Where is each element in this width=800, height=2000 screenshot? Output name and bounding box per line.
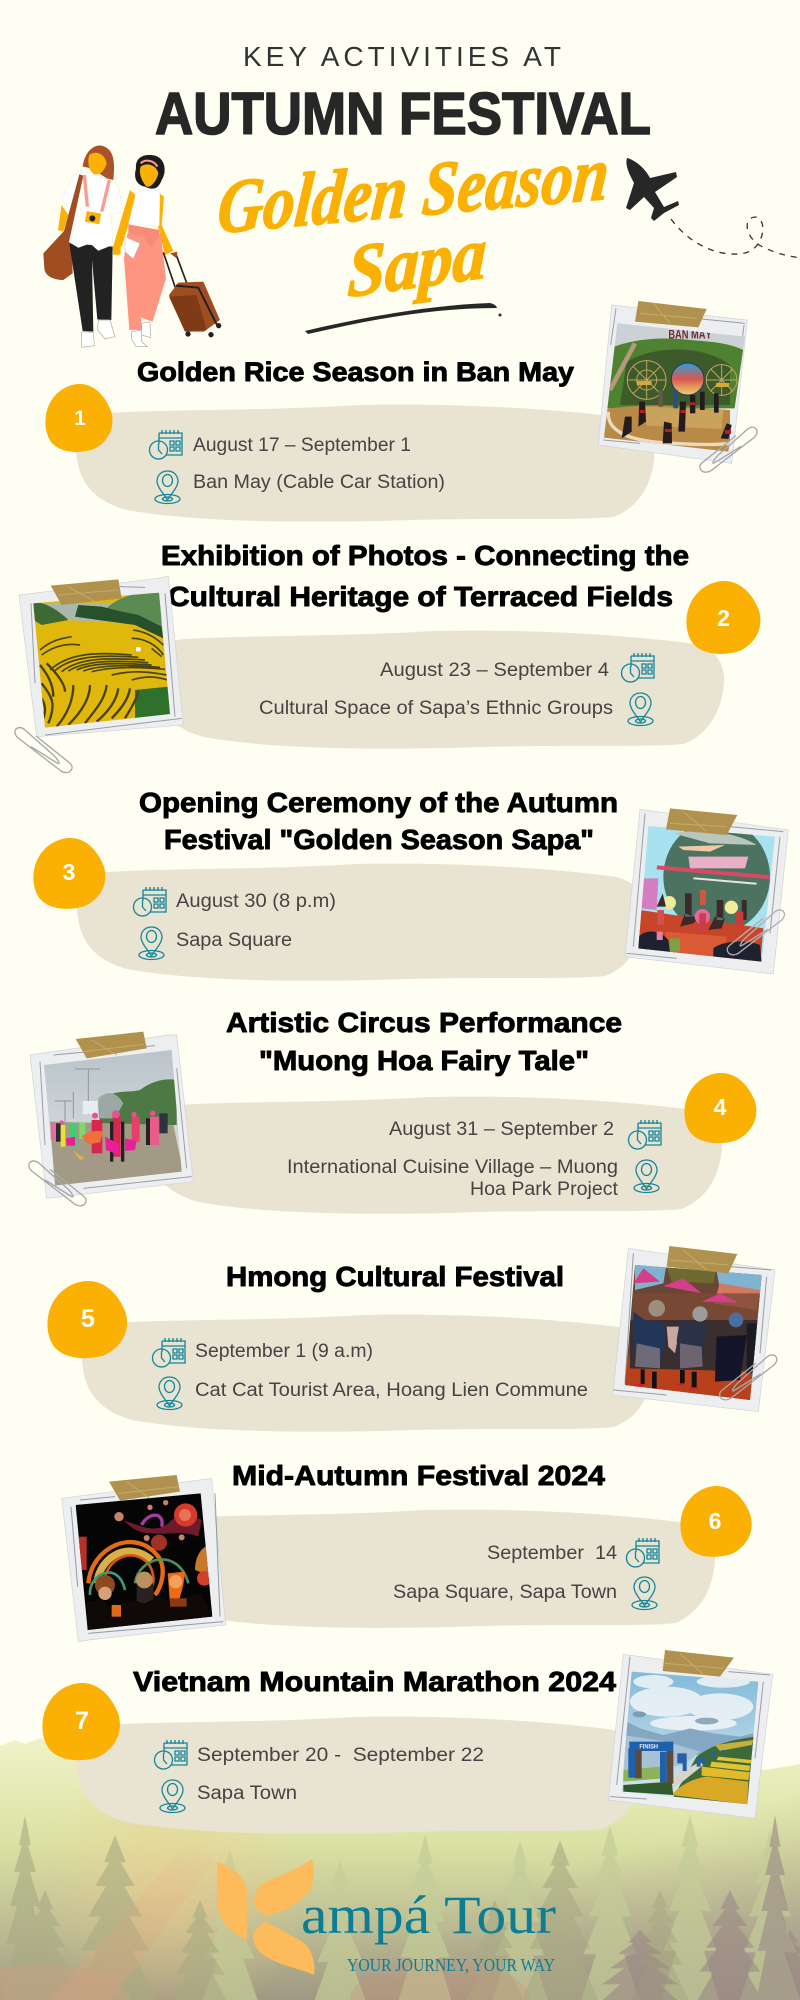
icon: location 5	[157, 1377, 182, 1410]
heading 2: Cultural Heritage of Terraced Fields	[168, 581, 673, 612]
logo wordmark: ampá Tour	[301, 1885, 556, 1945]
icon: airplane	[626, 158, 679, 221]
photo 7	[608, 1650, 773, 1818]
location 6: Sapa Square, Sapa Town	[393, 1582, 617, 1603]
panel background 2	[153, 631, 724, 749]
panel: activity 6	[62, 1460, 752, 1642]
brush underline	[305, 303, 502, 334]
illustration: two travelers	[43, 145, 221, 347]
photo 5	[613, 1246, 777, 1412]
icon: location 7	[160, 1780, 185, 1812]
icon: location 6	[632, 1577, 657, 1610]
heading 3: Opening Ceremony of the Autumn	[139, 787, 618, 818]
heading 5: Hmong Cultural Festival	[226, 1261, 564, 1292]
forest backdrop	[0, 1738, 800, 2000]
number badge 4: 4	[714, 1094, 727, 1120]
photo 2	[15, 576, 183, 773]
panel background 7	[76, 1717, 642, 1834]
flight path dashes	[671, 217, 800, 258]
panel background 5	[82, 1315, 654, 1432]
heading 4	[226, 1007, 622, 1076]
panel: activity 1	[45, 295, 770, 522]
photo 6	[62, 1475, 226, 1642]
location 7: Sapa Town	[197, 1783, 297, 1804]
logo mark	[217, 1859, 315, 1975]
panel background 3	[77, 864, 645, 981]
icon: calendar 6	[626, 1538, 659, 1567]
photo 1	[598, 301, 758, 473]
number badge 4	[684, 1073, 756, 1143]
date 6: September 14	[487, 1543, 617, 1564]
photo 4	[29, 1032, 193, 1206]
location 4: International Cuisine Village – Muong	[287, 1157, 618, 1178]
panel background 4	[148, 1097, 722, 1214]
icon: calendar 2	[622, 653, 654, 682]
panel background 6	[145, 1510, 715, 1628]
icon: calendar 7	[154, 1740, 187, 1769]
location 4	[287, 1157, 619, 1200]
location 5: Cat Cat Tourist Area, Hoang Lien Commune	[195, 1380, 588, 1401]
icon: location 2	[628, 693, 653, 726]
number badge 1	[45, 384, 113, 452]
icon: calendar 1	[150, 430, 182, 459]
panel: activity 5	[47, 1246, 777, 1432]
photo 1: BẢN MÂY	[668, 326, 712, 341]
number badge 5: 5	[81, 1305, 95, 1333]
number badge 3: 3	[63, 859, 75, 885]
heading 4: "Muong Hoa Fairy Tale"	[259, 1045, 589, 1076]
heading 3: Festival "Golden Season Sapa"	[164, 824, 594, 855]
title: golden season: Golden Season	[215, 131, 612, 250]
panel: activity 2	[15, 540, 760, 773]
location 3: Sapa Square	[176, 930, 292, 951]
heading 3	[139, 787, 618, 855]
title: key activities at: KEY ACTIVITIES AT	[243, 41, 561, 72]
date 7: September 20 - September 22	[197, 1745, 484, 1766]
logo: kampa tour	[217, 1859, 556, 1975]
photo 7: FINISH	[639, 1744, 658, 1751]
date 5: September 1 (9 a.m)	[195, 1341, 373, 1362]
heading 2	[161, 540, 689, 612]
heading 7: Vietnam Mountain Marathon 2024	[133, 1666, 616, 1697]
icon: calendar 5	[152, 1338, 185, 1367]
number badge 3	[33, 838, 105, 909]
location 2: Cultural Space of Sapa’s Ethnic Groups	[259, 698, 613, 719]
number badge 2	[686, 581, 760, 654]
location 4: Hoa Park Project	[470, 1179, 619, 1200]
number badge 7: 7	[75, 1707, 89, 1735]
heading 6: Mid-Autumn Festival 2024	[232, 1460, 605, 1491]
number badge 7	[42, 1683, 120, 1760]
icon: location 4	[634, 1160, 659, 1192]
number badge 6: 6	[709, 1508, 721, 1534]
icon: calendar 3	[134, 887, 166, 916]
panel: activity 3	[33, 787, 788, 981]
title: sapa: Sapa	[346, 212, 488, 314]
heading 4: Artistic Circus Performance	[226, 1007, 622, 1038]
logo tagline: YOUR JOURNEY, YOUR WAY	[347, 1955, 555, 1975]
icon: location 1	[155, 471, 180, 504]
panel: activity 4	[29, 1007, 756, 1214]
number badge 2: 2	[717, 605, 730, 631]
number badge 1: 1	[74, 407, 86, 430]
icon: calendar 4	[628, 1120, 661, 1149]
panel: activity 7	[42, 1650, 773, 1834]
icon: location 3	[139, 927, 164, 960]
title: autumn festival: AUTUMN FESTIVAL	[155, 81, 651, 147]
date 1: August 17 – September 1	[193, 435, 411, 456]
number badge 6	[680, 1486, 752, 1557]
date 4: August 31 – September 2	[389, 1119, 614, 1140]
heading 1: Golden Rice Season in Ban May	[137, 357, 574, 387]
location 1: Ban May (Cable Car Station)	[193, 472, 445, 493]
heading 2: Exhibition of Photos - Connecting the	[161, 540, 689, 571]
number badge 5	[47, 1281, 127, 1358]
photo 3	[625, 808, 788, 974]
date 2: August 23 – September 4	[380, 660, 609, 681]
date 3: August 30 (8 p.m)	[176, 891, 336, 912]
panel background 1	[76, 405, 655, 522]
